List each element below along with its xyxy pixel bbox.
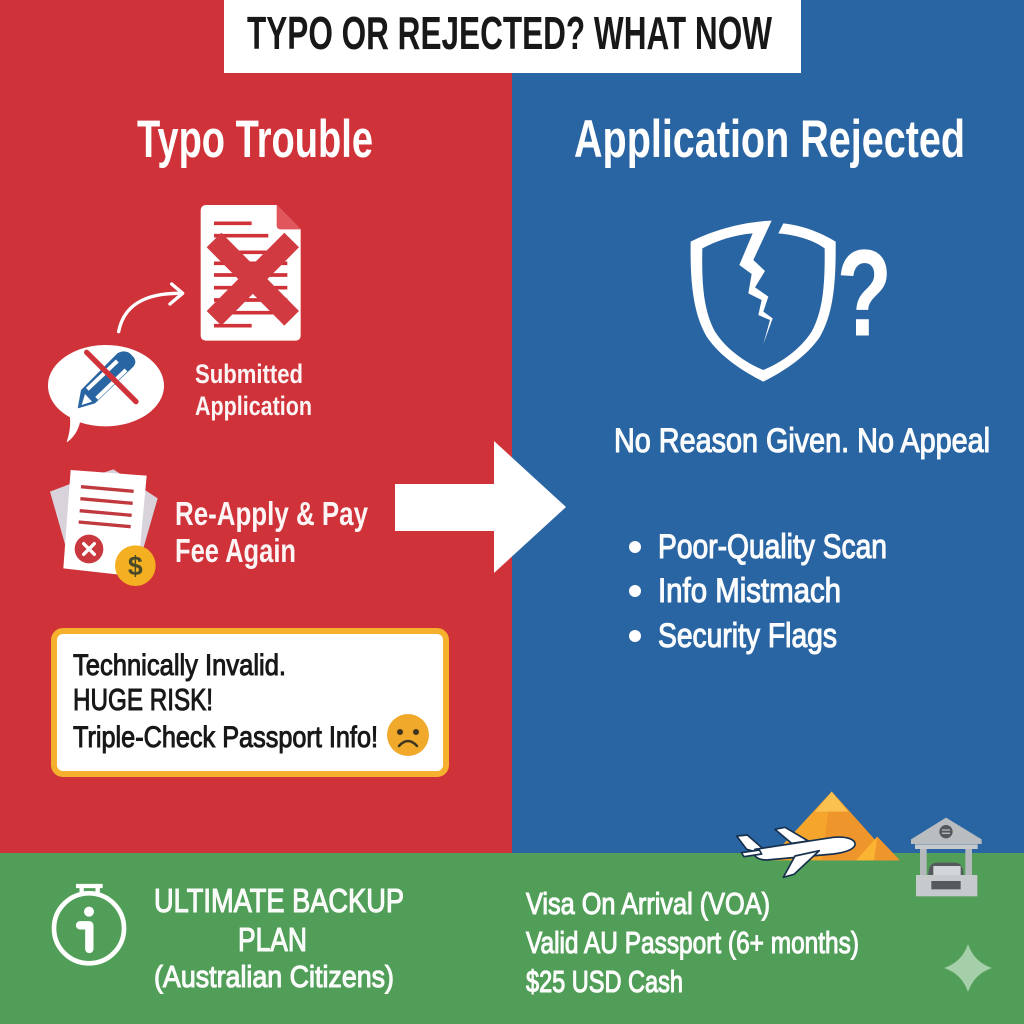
icon: visa office kiosk xyxy=(911,818,982,896)
heading: ultimate backup plan: PLAN xyxy=(238,921,307,958)
icon: papers with fee: $ xyxy=(128,551,143,581)
heading: ultimate backup plan: ULTIMATE BACKUP xyxy=(154,882,404,919)
heading: typo trouble: Typo Trouble xyxy=(137,110,373,169)
title: TYPO OR REJECTED? WHAT NOW xyxy=(247,7,772,59)
icon: airplane xyxy=(737,827,855,877)
list: rejection reasons xyxy=(629,528,887,655)
title xyxy=(224,0,801,73)
list: rejection reasons: Poor-Quality Scan xyxy=(658,528,887,566)
list: rejection reasons: Security Flags xyxy=(658,617,837,655)
panel: backup plan background xyxy=(0,853,1024,1024)
list: rejection reasons: Info Mistmach xyxy=(658,572,841,610)
text: re-apply and pay fee again xyxy=(175,495,369,569)
callout: warning box: HUGE RISK! xyxy=(73,682,213,717)
label: submitted application: Application xyxy=(195,391,312,421)
arrow: curved to document xyxy=(119,284,183,332)
icon: info stopwatch xyxy=(54,886,124,963)
text: re-apply and pay fee again: Re-Apply & Pay xyxy=(175,495,369,532)
icon: sparkle xyxy=(944,944,992,992)
icon: rejected document xyxy=(201,205,301,341)
icon: pyramids xyxy=(768,792,900,860)
text: visa on arrival requirements: Valid AU Passport (6+ months) xyxy=(526,925,859,960)
icon: cracked shield with question mark: ? xyxy=(837,224,892,362)
heading: ultimate backup plan: (Australian Citizens) xyxy=(154,959,394,994)
text: visa on arrival requirements: Visa On Arrival (VOA) xyxy=(526,886,770,921)
icon: cracked shield with question mark xyxy=(691,221,892,382)
callout: warning box: Technically Invalid. xyxy=(73,649,286,682)
callout: warning box xyxy=(54,631,446,774)
callout: warning box: Triple-Check Passport Info! xyxy=(73,721,378,754)
label: submitted application: Submitted xyxy=(195,359,303,389)
panel: typo trouble background xyxy=(0,0,512,854)
text: visa on arrival requirements xyxy=(526,886,859,999)
text: visa on arrival requirements: $25 USD Cash xyxy=(526,964,683,999)
label: submitted application xyxy=(195,359,312,421)
panel: application rejected background xyxy=(512,0,1024,854)
text: re-apply and pay fee again: Fee Again xyxy=(175,532,296,569)
icon: papers with fee xyxy=(50,469,158,586)
icon: speech bubble with crossed pencil xyxy=(48,345,164,442)
arrow: big white arrow xyxy=(395,441,566,573)
heading: ultimate backup plan xyxy=(154,882,404,994)
icon: sad face xyxy=(387,714,429,756)
